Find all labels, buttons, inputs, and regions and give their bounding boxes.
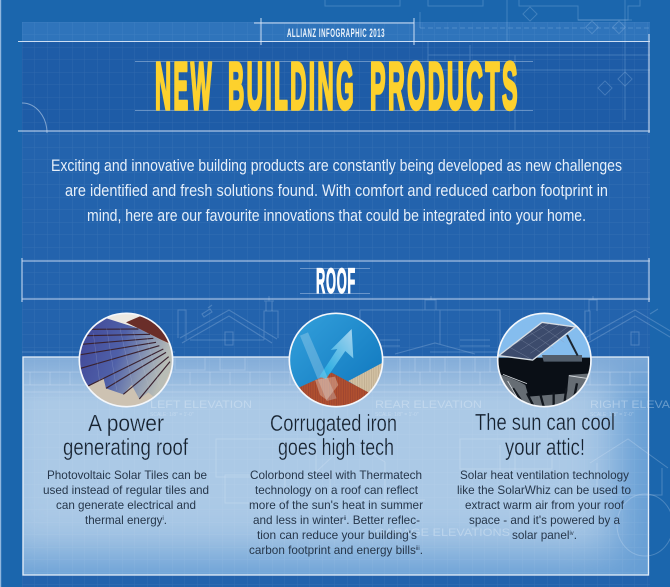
body text: solar tiles: thermal energy (85, 513, 165, 527)
heading: the sun can cool your attic (475, 409, 615, 460)
heading: a power generating roof: generating roof (63, 434, 188, 460)
card: corrugated iron goes high tech (249, 410, 423, 557)
heading: corrugated iron: goes high tech (278, 434, 394, 460)
body text: solar heat ventilation (457, 468, 631, 542)
blueprint captions: SCALE: 1/8" = 1'-0" (375, 412, 419, 418)
blueprint captions: RIGHT ELEVA (590, 399, 670, 411)
faint elevation drawings inside panel (24, 358, 670, 556)
body text: colorbond steel: . Better reflec- (346, 513, 420, 527)
heading: corrugated iron (270, 410, 397, 460)
badge: Allianz Infographic 2013: ALLIANZ INFOGRAPHIC 2013 (287, 26, 385, 40)
icon: solar tiles roof photo (77, 312, 177, 408)
blueprint captions: GARAGE ELEVATIONS (375, 527, 510, 539)
blueprint captions (150, 399, 670, 539)
blueprint captions: SCALE: 1/8" = 1'-0" (150, 412, 194, 418)
body text: colorbond steel: tion can reduce your building's (257, 528, 417, 542)
infographic canvas: ROOF (316, 262, 356, 301)
body text: solar heat ventilation: extract warm air from your roof (465, 498, 625, 512)
blueprint captions: REAR ELEVATION (375, 399, 482, 411)
section rules: roof (22, 258, 650, 302)
title (155, 49, 520, 124)
card: a power generating roof (43, 410, 209, 527)
heading: the sun can cool your attic: your attic! (505, 434, 585, 460)
blueprint captions: LEFT ELEVATION (150, 399, 252, 411)
panel: light content area (0, 350, 648, 575)
heading: a power generating roof (63, 410, 188, 460)
body text: colorbond steel: Colorbond steel with Thermatech (250, 468, 422, 482)
blueprint floor plan (22, 0, 650, 133)
body text: colorbond steel: carbon footprint and energy bills (249, 543, 420, 557)
blueprint captions: SCALE: 1/8" = 1'-0" (590, 412, 634, 418)
icon: corrugated iron roof with arrow (287, 312, 387, 412)
heading: corrugated iron: Corrugated iron (270, 410, 397, 436)
body text: solar tiles: Photovoltaic Solar Tiles can be (47, 468, 207, 482)
title guide lines (135, 62, 533, 110)
card: the sun can cool your attic (457, 409, 631, 542)
body text: colorbond steel: ii (344, 516, 346, 522)
body text: colorbond steel: . (420, 543, 423, 557)
body text: colorbond steel (249, 468, 423, 557)
body text: solar heat ventilation: . (574, 528, 577, 542)
intro text (51, 156, 622, 225)
house elevations (22, 296, 670, 354)
body text: colorbond steel: technology on a roof can reflect (255, 483, 419, 497)
body text: solar tiles: i (162, 516, 164, 522)
body text: colorbond steel: and less in winter (253, 513, 346, 527)
body text: solar tiles: . (164, 513, 167, 527)
body text: solar tiles: can generate electrical and (56, 498, 196, 512)
body text: solar heat ventilation: Solar heat ventilation technology (460, 468, 629, 482)
body text: solar tiles (43, 468, 209, 527)
body text: solar heat ventilation: iv (569, 531, 574, 537)
body text: solar heat ventilation: like the SolarWhiz can be used to (457, 483, 631, 497)
heading: the sun can cool your attic: The sun can cool (475, 409, 615, 435)
heading: a power generating roof: A power (88, 410, 164, 436)
body text: solar heat ventilation: solar panel (512, 528, 571, 542)
body text: solar heat ventilation: space - and it's powered by a (469, 513, 620, 527)
title: NEW (155, 49, 214, 124)
body text: colorbond steel: more of the sun's heat in summer (249, 498, 423, 512)
header rules (18, 18, 650, 133)
body text: colorbond steel: iii (416, 546, 420, 552)
icon: solar attic ventilator (497, 312, 594, 408)
title: BUILDING (228, 49, 356, 124)
body text: solar tiles: used instead of regular tiles and (43, 483, 209, 497)
